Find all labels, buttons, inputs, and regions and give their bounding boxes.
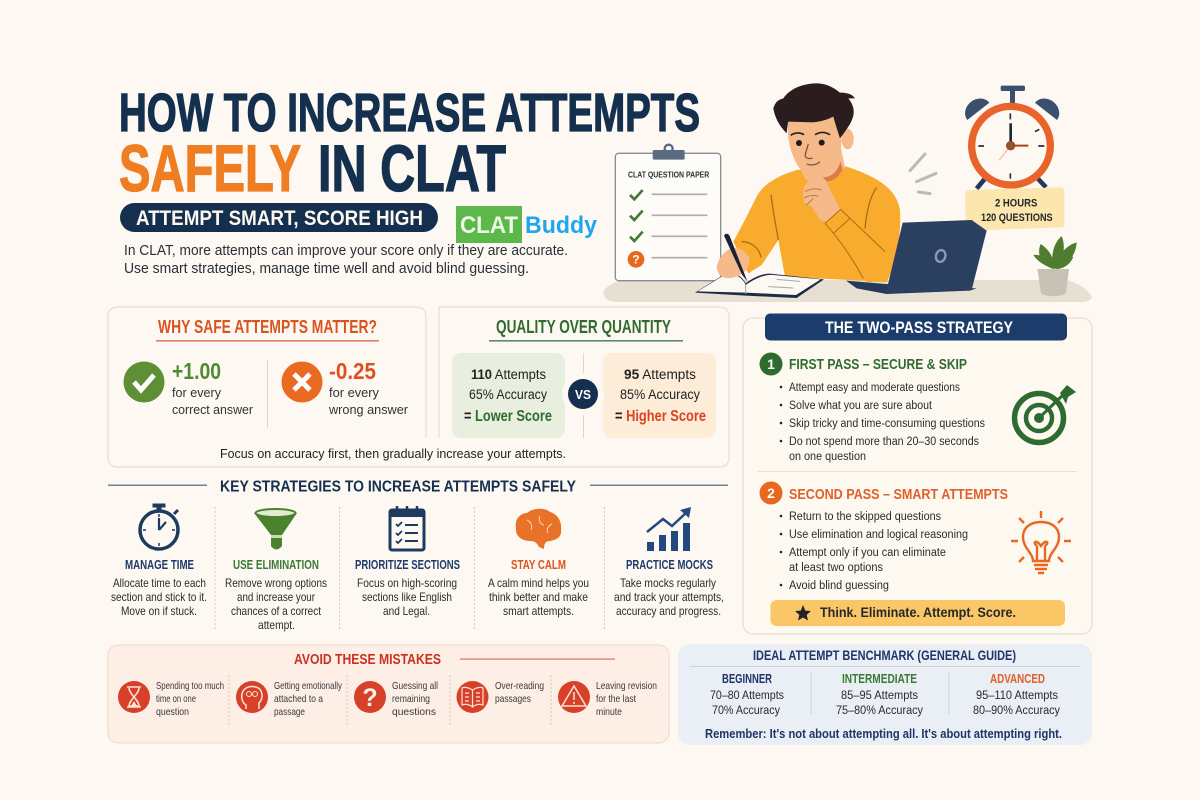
- strategy: manage time: Move on if stuck.: [121, 604, 197, 618]
- clipboard: ?: [632, 254, 640, 267]
- icon: funnel: [254, 509, 297, 550]
- wrong answer score: -0.25: [329, 358, 376, 384]
- mistake: attached to passage: attached to a: [274, 693, 323, 705]
- icon: checklist: [390, 506, 424, 550]
- vs badge: [562, 373, 604, 415]
- strategy: stay calm: smart attempts.: [503, 604, 574, 618]
- panel: why safe attempts matter and quality over quantity: [108, 307, 729, 467]
- higher score card: = Higher Score: [615, 408, 706, 425]
- first pass: [760, 352, 985, 463]
- icon: stopwatch: [140, 504, 178, 549]
- correct answer score: for every: [172, 386, 222, 400]
- strategy: manage time: section and stick to it.: [111, 590, 207, 604]
- second pass: Use elimination and logical reasoning: [789, 529, 968, 541]
- mistake: last-minute revision: minute: [596, 706, 622, 718]
- mistake: attached to passage: [236, 680, 343, 718]
- subtitle pill: ATTEMPT SMART, SCORE HIGH: [136, 207, 423, 230]
- benchmark: advanced: 95–110 Attempts: [976, 690, 1058, 702]
- intro text: Use smart strategies, manage time well and avoid blind guessing.: [124, 261, 529, 277]
- title: HOW TO INCREASE ATTEMPTS: [119, 83, 700, 143]
- strategy: prioritize sections: sections like English: [362, 590, 452, 604]
- mistake: too much time: Spending too much: [156, 680, 224, 692]
- clipboard: [615, 145, 721, 281]
- heading: key strategies: KEY STRATEGIES TO INCREASE ATTEMPTS SAFELY: [220, 478, 576, 496]
- icon: light bulb: [1011, 511, 1071, 573]
- strategy: manage time: MANAGE TIME: [125, 558, 194, 572]
- first pass: Skip tricky and time-consuming questions: [789, 418, 985, 430]
- title: SAFELY: [119, 131, 301, 205]
- mistake: last-minute revision: Leaving revision: [596, 680, 657, 692]
- icon: target: [1014, 385, 1076, 442]
- time label: 120 QUESTIONS: [981, 212, 1053, 224]
- mistake: guessing: remaining: [392, 693, 430, 705]
- mistake: over-reading: passages: [495, 693, 531, 705]
- second pass: at least two options: [789, 562, 883, 574]
- strategy: use elimination: USE ELIMINATION: [233, 558, 319, 572]
- lower score card: 110 Attempts: [471, 367, 546, 382]
- mistake: guessing: questions: [392, 706, 436, 718]
- panel: two-pass strategy: [743, 314, 1092, 634]
- higher score card: 85% Accuracy: [620, 387, 700, 402]
- wrong answer score: wrong answer: [328, 403, 408, 417]
- title: [119, 83, 700, 205]
- lower score card: 65% Accuracy: [469, 387, 547, 402]
- intro text: In CLAT, more attempts can improve your score only if they are accurate.: [124, 243, 568, 259]
- benchmark: intermediate: [836, 672, 923, 717]
- strategy: use elimination: attempt.: [258, 618, 295, 632]
- alarm clock: [960, 86, 1064, 189]
- desk: [603, 280, 1092, 302]
- notebook: [695, 274, 824, 298]
- logo: CLATBuddy: [456, 206, 598, 243]
- heading: quality over quantity: QUALITY OVER QUANTITY: [496, 317, 671, 337]
- intro text: [124, 243, 568, 277]
- first pass: Solve what you are sure about: [789, 400, 933, 412]
- benchmark: beginner: 70% Accuracy: [712, 705, 780, 717]
- clipboard: CLAT QUESTION PAPER: [628, 170, 709, 180]
- first pass: on one question: [789, 451, 866, 463]
- heading: why safe attempts matter: WHY SAFE ATTEMPTS MATTER?: [158, 317, 377, 337]
- strategy: practice mocks: and track your attempts,: [614, 590, 724, 604]
- second pass: 2: [767, 485, 775, 501]
- mistake: too much time: time on one: [156, 693, 196, 705]
- reminder: Remember: It's not about attempting all. It's about attempting right.: [705, 727, 1062, 741]
- mistake: too much time: [118, 680, 224, 718]
- writing hand and pen: [717, 234, 749, 281]
- strategy: use elimination: and increase your: [237, 590, 315, 604]
- correct answer score: correct answer: [172, 403, 253, 417]
- mistake: guessing: ?: [362, 684, 378, 712]
- strategy: practice mocks: [614, 507, 724, 618]
- logo: CLATBuddy: CLAT: [460, 212, 518, 239]
- strategy: stay calm: [488, 509, 589, 618]
- first pass: FIRST PASS – SECURE & SKIP: [789, 356, 967, 373]
- lower score card: = Lower Score: [464, 408, 552, 425]
- time label: [965, 187, 1064, 231]
- benchmark: beginner: [710, 672, 784, 717]
- mistake: over-reading: Over-reading: [495, 680, 544, 692]
- benchmark: advanced: ADVANCED: [990, 672, 1045, 686]
- mistake: guessing: [354, 680, 438, 718]
- strategy: prioritize sections: PRIORITIZE SECTIONS: [355, 558, 460, 572]
- higher score card: 95 Attempts: [624, 367, 696, 382]
- accuracy note: Focus on accuracy first, then gradually increase your attempts.: [220, 446, 566, 461]
- correct answer score: +1.00: [172, 358, 221, 384]
- first pass: Do not spend more than 20–30 seconds: [789, 436, 979, 448]
- strategy: practice mocks: accuracy and progress.: [616, 604, 721, 618]
- strategy: prioritize sections: and Legal.: [383, 604, 430, 618]
- strategy: use elimination: chances of a correct: [231, 604, 322, 618]
- strategy: use elimination: Remove wrong options: [225, 576, 327, 590]
- lower score card: [452, 353, 565, 438]
- panel: benchmark: IDEAL ATTEMPT BENCHMARK (GENERAL GUIDE): [753, 647, 1016, 663]
- callout: think eliminate attempt score: [770, 600, 1065, 626]
- strategy: stay calm: think better and make: [489, 590, 588, 604]
- strategy: use elimination: [225, 509, 327, 632]
- mistake: too much time: question: [156, 706, 189, 718]
- higher score card: [603, 353, 716, 438]
- second pass: [760, 482, 1008, 592]
- motion marks: [910, 154, 936, 194]
- laptop: [846, 220, 987, 294]
- strategy: prioritize sections: Focus on high-scoring: [357, 576, 457, 590]
- mistake: last-minute revision: for the last: [596, 693, 636, 705]
- logo: CLATBuddy: Buddy: [525, 212, 598, 239]
- strategy: manage time: [111, 504, 207, 618]
- second pass: SECOND PASS – SMART ATTEMPTS: [789, 486, 1008, 503]
- second pass: Avoid blind guessing: [789, 580, 889, 592]
- heading: two-pass strategy: [765, 314, 1067, 340]
- benchmark: intermediate: INTERMEDIATE: [842, 672, 917, 686]
- plant: [1033, 236, 1077, 296]
- mistake: guessing: Guessing all: [392, 680, 438, 692]
- panel: avoid these mistakes: AVOID THESE MISTAKES: [294, 652, 441, 668]
- wrong answer score: for every: [329, 386, 380, 400]
- mistake: last-minute revision: [558, 680, 657, 718]
- icon: brain: [516, 509, 561, 549]
- benchmark: advanced: [973, 672, 1060, 717]
- time label: 2 HOURS: [995, 198, 1037, 210]
- strategy: practice mocks: PRACTICE MOCKS: [626, 558, 713, 572]
- correct answer score: [124, 358, 253, 417]
- second pass: Return to the skipped questions: [789, 511, 941, 523]
- heading: two-pass strategy: THE TWO-PASS STRATEGY: [825, 318, 1014, 337]
- benchmark: advanced: 80–90% Accuracy: [973, 705, 1060, 717]
- second pass: Attempt only if you can eliminate: [789, 547, 946, 559]
- strategy: practice mocks: Take mocks regularly: [620, 576, 716, 590]
- strategy: stay calm: A calm mind helps you: [488, 576, 589, 590]
- first pass: Attempt easy and moderate questions: [789, 382, 960, 394]
- strategy: prioritize sections: [355, 506, 460, 618]
- benchmark: beginner: 70–80 Attempts: [710, 690, 784, 702]
- strategy: stay calm: STAY CALM: [511, 558, 566, 572]
- benchmark: intermediate: 75–80% Accuracy: [836, 705, 923, 717]
- mistake: over-reading: [456, 680, 544, 713]
- panel: avoid these mistakes: [108, 645, 669, 743]
- panel: benchmark: [678, 644, 1092, 745]
- mistake: attached to passage: passage: [274, 706, 305, 718]
- title: IN CLAT: [318, 131, 506, 205]
- icon: growth chart: [647, 507, 691, 551]
- vs badge: VS: [575, 387, 591, 402]
- illustration: student at desk: [603, 83, 1092, 302]
- benchmark: intermediate: 85–95 Attempts: [841, 690, 918, 702]
- benchmark: beginner: BEGINNER: [722, 672, 772, 686]
- wrong answer score: [282, 358, 408, 417]
- first pass: 1: [767, 356, 775, 372]
- strategy: manage time: Allocate time to each: [113, 576, 206, 590]
- mistake: attached to passage: Getting emotionally: [274, 680, 343, 692]
- person: [733, 83, 900, 282]
- callout: think eliminate attempt score: Think. Eliminate. Attempt. Score.: [820, 605, 1016, 620]
